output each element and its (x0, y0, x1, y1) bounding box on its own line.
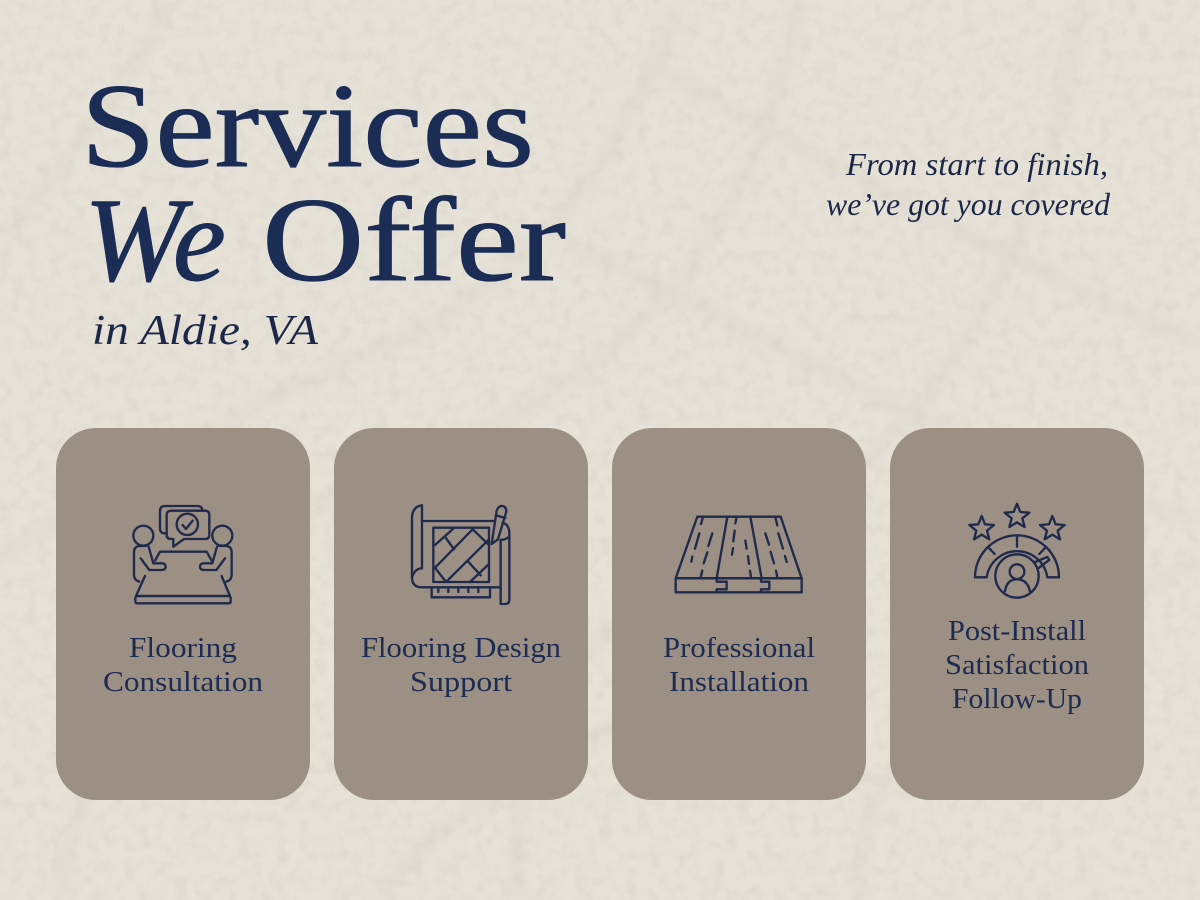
label: Consultation (103, 667, 263, 698)
label: Post-Install (948, 616, 1086, 647)
tagline: we’ve got you covered (826, 186, 1111, 222)
label (945, 616, 1089, 715)
icon: stars and satisfaction gauge (969, 504, 1065, 598)
panel: post-install follow-up (890, 428, 1144, 800)
title: Services We Offer (81, 59, 566, 306)
tagline (826, 146, 1111, 222)
label: Flooring Design (361, 633, 561, 664)
subtitle: location: in Aldie, VA (92, 308, 318, 354)
icon: blueprint with pencil (412, 505, 509, 604)
label: Support (410, 667, 512, 698)
label (663, 633, 815, 698)
title: Services We Offer: We (84, 173, 226, 306)
panel: flooring design support (334, 428, 588, 800)
label: Satisfaction (945, 650, 1089, 681)
label: Professional (663, 633, 815, 664)
label: Follow-Up (952, 684, 1082, 715)
label: Flooring (129, 633, 237, 664)
icon: meeting with speech bubble (133, 506, 232, 603)
tagline: From start to finish, (845, 146, 1108, 182)
label (361, 633, 561, 698)
title: Services We Offer: Services (81, 59, 534, 192)
label: Installation (669, 667, 809, 698)
label (103, 633, 263, 698)
panel: flooring consultation (56, 428, 310, 800)
icon: floor planks (676, 517, 802, 592)
title: Services We Offer: Offer (262, 173, 566, 306)
panel: professional installation (612, 428, 866, 800)
